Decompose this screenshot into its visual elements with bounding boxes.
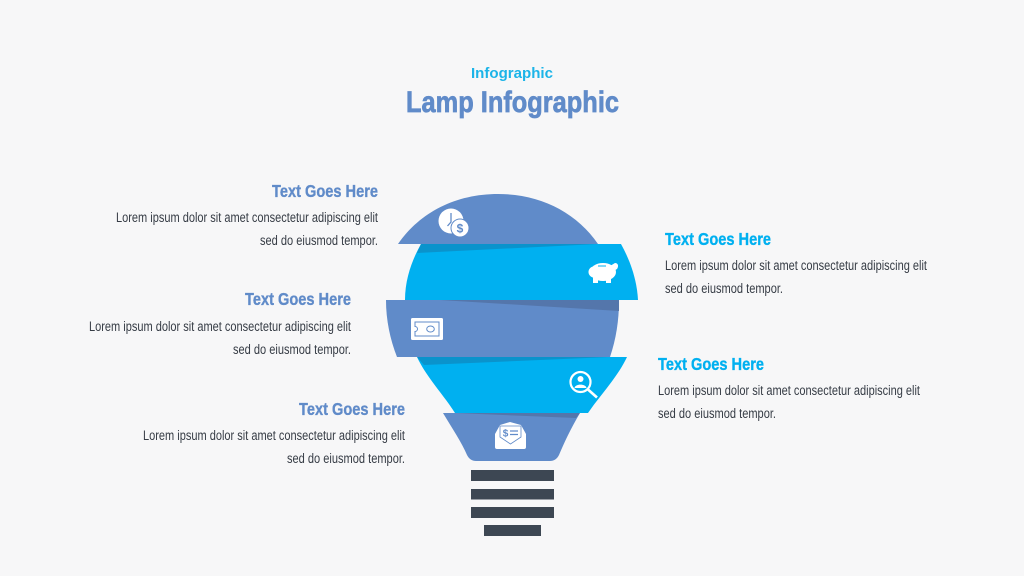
text block: bottom left: Text Goes Here <box>299 399 405 419</box>
text block: upper right <box>665 229 927 296</box>
title block <box>406 65 619 119</box>
band 1: top dome <box>398 194 598 244</box>
lamp base bars <box>471 470 554 536</box>
text block: lower right: Lorem ipsum dolor sit amet consectetur adipiscing elit <box>658 383 920 398</box>
text block: top left <box>116 181 378 248</box>
text block: middle left: Lorem ipsum dolor sit amet consectetur adipiscing elit <box>89 319 351 334</box>
band 3: blue slice <box>386 300 619 357</box>
text block: upper right: Lorem ipsum dolor sit amet consectetur adipiscing elit <box>665 258 927 273</box>
text block: middle left: Text Goes Here <box>245 289 351 309</box>
text block: upper right: sed do eiusmod tempor. <box>665 281 783 296</box>
band 4: cyan slice <box>417 357 627 413</box>
text block: top left: sed do eiusmod tempor. <box>260 233 378 248</box>
text block: middle left: sed do eiusmod tempor. <box>233 342 351 357</box>
band 5: lamp neck <box>443 413 580 461</box>
text block: top left: Lorem ipsum dolor sit amet consectetur adipiscing elit <box>116 210 378 225</box>
text block: middle left <box>89 289 351 357</box>
icon: clock and dollar coin <box>438 208 469 237</box>
icon: envelope with money: $ <box>503 428 509 440</box>
main title: Lamp Infographic <box>406 86 619 119</box>
text block: lower right <box>658 354 920 421</box>
icon: magnifier with person <box>570 372 597 398</box>
icon: piggy bank <box>588 263 618 283</box>
text block: bottom left: sed do eiusmod tempor. <box>287 451 405 466</box>
text block: bottom left: Lorem ipsum dolor sit amet consectetur adipiscing elit <box>143 428 405 443</box>
text block: upper right: Text Goes Here <box>665 229 771 249</box>
icon: envelope with money <box>495 422 526 449</box>
lamp illustration <box>386 194 638 536</box>
band 2: cyan slice <box>405 244 638 300</box>
eyebrow label: Infographic <box>471 65 553 82</box>
text block: lower right: Text Goes Here <box>658 354 764 374</box>
text block: top left: Text Goes Here <box>272 181 378 201</box>
text block: lower right: sed do eiusmod tempor. <box>658 406 776 421</box>
text block: bottom left <box>143 399 405 466</box>
icon: ticket card <box>411 318 443 340</box>
icon: clock and dollar coin: $ <box>457 222 464 236</box>
